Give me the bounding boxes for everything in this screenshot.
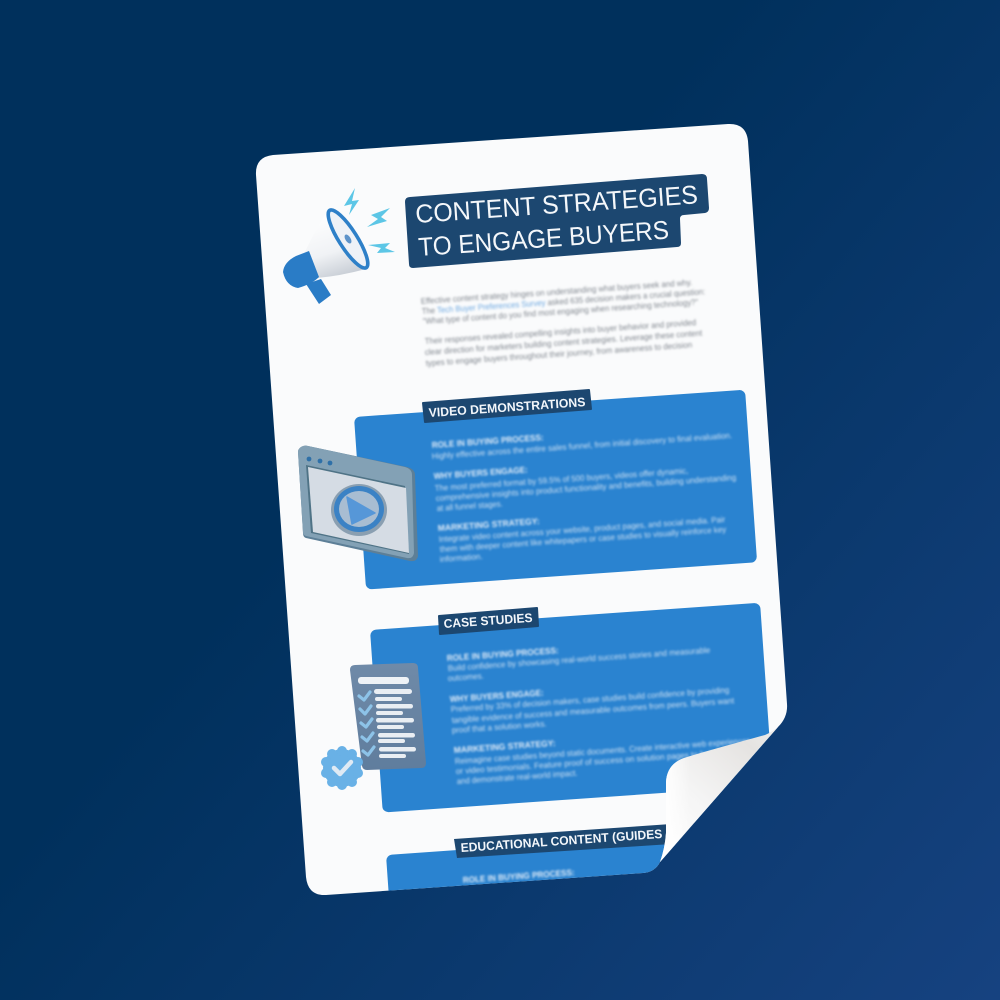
video panel text: WHY BUYERS ENGAGE: xyxy=(433,464,528,481)
case studies panel text: Reimagine case studies beyond static documents. Create interactive web experiences xyxy=(455,736,750,766)
case studies panel text: Build confidence by showcasing real-world success stories and measurable xyxy=(448,646,711,673)
panel: video demonstrations xyxy=(354,389,757,590)
heading: educational content xyxy=(454,822,702,858)
case studies panel text: outcomes. xyxy=(448,672,484,683)
case studies panel text: Preferred by 33% of decision makers, case studies build confidence by providing xyxy=(451,686,730,714)
title banner: TO ENGAGE BUYERS xyxy=(417,215,670,262)
video panel text: Highly effective across the entire sales funnel, from initial discovery to final evaluation. xyxy=(432,431,732,461)
title banner xyxy=(405,174,709,268)
video panel text: The most preferred format by 59.5% of 500 buyers, videos offer dynamic, xyxy=(435,466,689,493)
case studies panel text: proof that a solution works. xyxy=(452,719,547,735)
intro text: Effective content strategy hinges on understanding what buyers seek and why. xyxy=(420,277,692,306)
case studies panel text: or video testimonials. Feature proof of success on solution pages to build trust xyxy=(456,747,736,776)
intro text: The Tech Buyer Preferences Survey asked 635 decision makers a crucial question: xyxy=(421,286,705,316)
video panel text: MARKETING STRATEGY: xyxy=(437,516,540,533)
paper sheet xyxy=(256,124,788,895)
title banner: CONTENT STRATEGIES xyxy=(414,179,699,229)
video panel text: them with deeper content like whitepapers or case studies to visually reinforce key xyxy=(440,525,727,554)
case studies panel text: MARKETING STRATEGY: xyxy=(453,738,556,755)
intro text: "What type of content do you find most engaging when researching technology?" xyxy=(422,297,698,326)
case studies panel text: ROLE IN BUYING PROCESS: xyxy=(446,645,559,663)
video panel text: ROLE IN BUYING PROCESS: xyxy=(431,432,544,450)
heading: case studies xyxy=(438,607,539,635)
intro text: clear direction for marketers building content strategies. Leverage these content xyxy=(424,328,703,357)
case studies panel text: tangible evidence of success and measurable outcomes from peers. Buyers want xyxy=(452,696,735,725)
panel: educational content xyxy=(386,822,694,891)
icon: checklist board xyxy=(350,663,426,770)
heading: educational content: EDUCATIONAL CONTENT (GUIDES xyxy=(460,827,663,855)
heading: video demonstrations: VIDEO DEMONSTRATIONS xyxy=(428,395,586,420)
case studies panel text: and demonstrate real-world impact. xyxy=(457,769,578,786)
heading: video demonstrations xyxy=(422,389,592,423)
icon: video player window xyxy=(298,446,418,561)
video panel text: at all funnel stages. xyxy=(437,499,503,513)
case studies panel text xyxy=(446,645,750,786)
intro text xyxy=(420,277,705,368)
educational panel text: ROLE IN BUYING PROCESS: xyxy=(462,867,575,885)
video panel text: information. xyxy=(440,552,483,564)
icon: megaphone xyxy=(283,205,374,304)
video panel text: Integrate video content across your website, product pages, and social media. Pair xyxy=(439,515,726,544)
page curl xyxy=(660,727,778,862)
icon: verified badge xyxy=(321,746,363,790)
case studies panel text: WHY BUYERS ENGAGE: xyxy=(449,687,544,704)
intro text: types to engage buyers throughout their journey, from awareness to decision xyxy=(425,339,693,368)
video panel text xyxy=(431,431,737,564)
intro text: Their responses revealed compelling insights into buyer behavior and provided xyxy=(424,317,697,346)
heading: case studies: CASE STUDIES xyxy=(443,611,533,631)
icon: lightning bolts xyxy=(344,188,395,253)
panel: case studies xyxy=(370,603,773,813)
video panel text: comprehensive insights into product functionality and benefits, building understanding xyxy=(436,473,737,503)
